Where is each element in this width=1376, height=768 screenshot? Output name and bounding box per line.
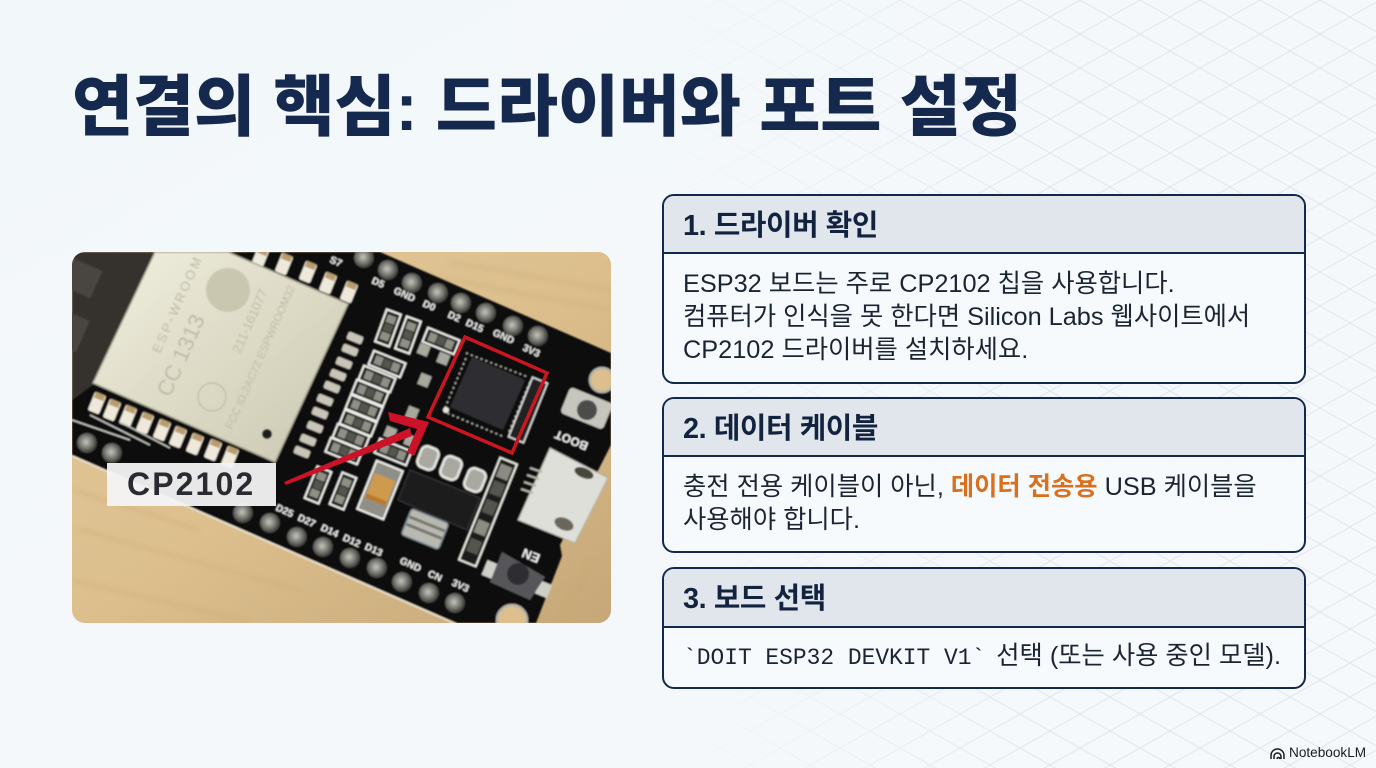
top pads — [251, 246, 358, 304]
top pin labels: 3V3 — [521, 343, 542, 360]
BOOT button: BOOT — [552, 427, 590, 453]
card 2 body: 충전 전용 케이블이 아닌, 데이터 전송용 USB 케이블을 — [683, 473, 1257, 501]
CP2102 chip — [443, 353, 530, 436]
CP2102 label — [107, 463, 276, 506]
photo: ESP32 board with CP2102 callout — [72, 252, 611, 623]
card 1 body — [683, 270, 1250, 364]
title: 연결의 핵심: 드라이버와 포트 설정 — [72, 71, 1022, 145]
metal pad — [401, 509, 449, 549]
card 2: data cable — [662, 397, 1306, 553]
card 2 body: 사용해야 합니다. — [683, 506, 860, 534]
card 3: board selection — [662, 567, 1306, 689]
bottom pin labels — [274, 503, 471, 595]
CP2102 label: CP2102 — [127, 466, 255, 502]
top pin labels: D5 — [370, 276, 386, 291]
top header pins — [354, 248, 548, 346]
regulator chip — [398, 470, 480, 530]
bottom pin labels: CN — [426, 569, 443, 585]
bottom header pins — [77, 433, 465, 613]
bottom pin labels: D14 — [319, 523, 340, 540]
right resistor strip — [509, 377, 547, 443]
tantalum capacitor — [357, 461, 403, 519]
module markings — [149, 253, 298, 439]
dark left area — [72, 252, 156, 400]
small pads — [383, 343, 450, 448]
card 1 body: 컴퓨터가 인식을 못 한다면 Silicon Labs 웹사이트에서 — [683, 303, 1250, 331]
USB connector — [518, 448, 608, 543]
module markings: CC 1313 — [152, 311, 210, 400]
module markings: ESP-WROOM — [149, 253, 206, 355]
top pin labels: GND — [491, 328, 516, 347]
card 2 heading — [664, 399, 1304, 457]
background grid — [796, 0, 1376, 768]
resistor arrays — [305, 309, 460, 510]
red arrow — [284, 412, 429, 485]
top pin labels: GND — [392, 286, 417, 305]
ESP32 module shield — [93, 252, 348, 462]
top pin labels: D15 — [464, 318, 485, 335]
top pin labels: D2 — [446, 310, 462, 325]
circuit board — [72, 252, 611, 623]
bottom pin labels: D27 — [296, 513, 317, 530]
card 1 heading: 1. 드라이버 확인 — [683, 210, 878, 242]
bottom pin labels: 3V3 — [450, 578, 471, 595]
top pin labels: S7 — [328, 255, 344, 270]
card 3 body: `DOIT ESP32 DEVKIT V1` 선택 (또는 사용 중인 모델). — [683, 642, 1281, 671]
bottom pin labels: D13 — [363, 542, 384, 559]
card 2 heading: 2. 데이터 케이블 — [683, 413, 878, 445]
card 1 heading — [664, 196, 1304, 254]
card 1 body: ESP32 보드는 주로 CP2102 칩을 사용합니다. — [683, 270, 1175, 298]
left pin wires — [72, 415, 170, 448]
icon: NotebookLM arcs — [1270, 748, 1285, 759]
wood table — [72, 252, 611, 623]
mounting holes — [497, 368, 614, 635]
card 2 body — [683, 473, 1257, 534]
bottom pin labels: D25 — [274, 503, 295, 520]
BOOT button — [552, 387, 613, 453]
bottom pin labels: D12 — [341, 533, 362, 550]
side pads — [293, 331, 364, 459]
EN button: EN — [520, 545, 542, 566]
card 3 heading — [664, 569, 1304, 628]
top pin labels — [328, 255, 542, 360]
red highlight box — [428, 337, 547, 453]
EN button — [482, 545, 552, 600]
NotebookLM logo: NotebookLM — [1289, 745, 1366, 760]
board edge highlight — [72, 456, 456, 624]
card 3 heading: 3. 보드 선택 — [683, 583, 826, 615]
module markings: FCC ID:2AC7Z ESPWROOM32 — [224, 284, 298, 431]
top pin labels: D0 — [421, 299, 437, 314]
card 1 body: CP2102 드라이버를 설치하세요. — [683, 336, 1028, 364]
regulator pads — [416, 444, 487, 494]
module markings: 211-161077 — [229, 287, 271, 355]
bottom pin labels: GND — [398, 556, 423, 575]
bottom pads — [88, 391, 239, 469]
card 1: driver check — [662, 194, 1306, 384]
right column parts — [459, 458, 517, 566]
